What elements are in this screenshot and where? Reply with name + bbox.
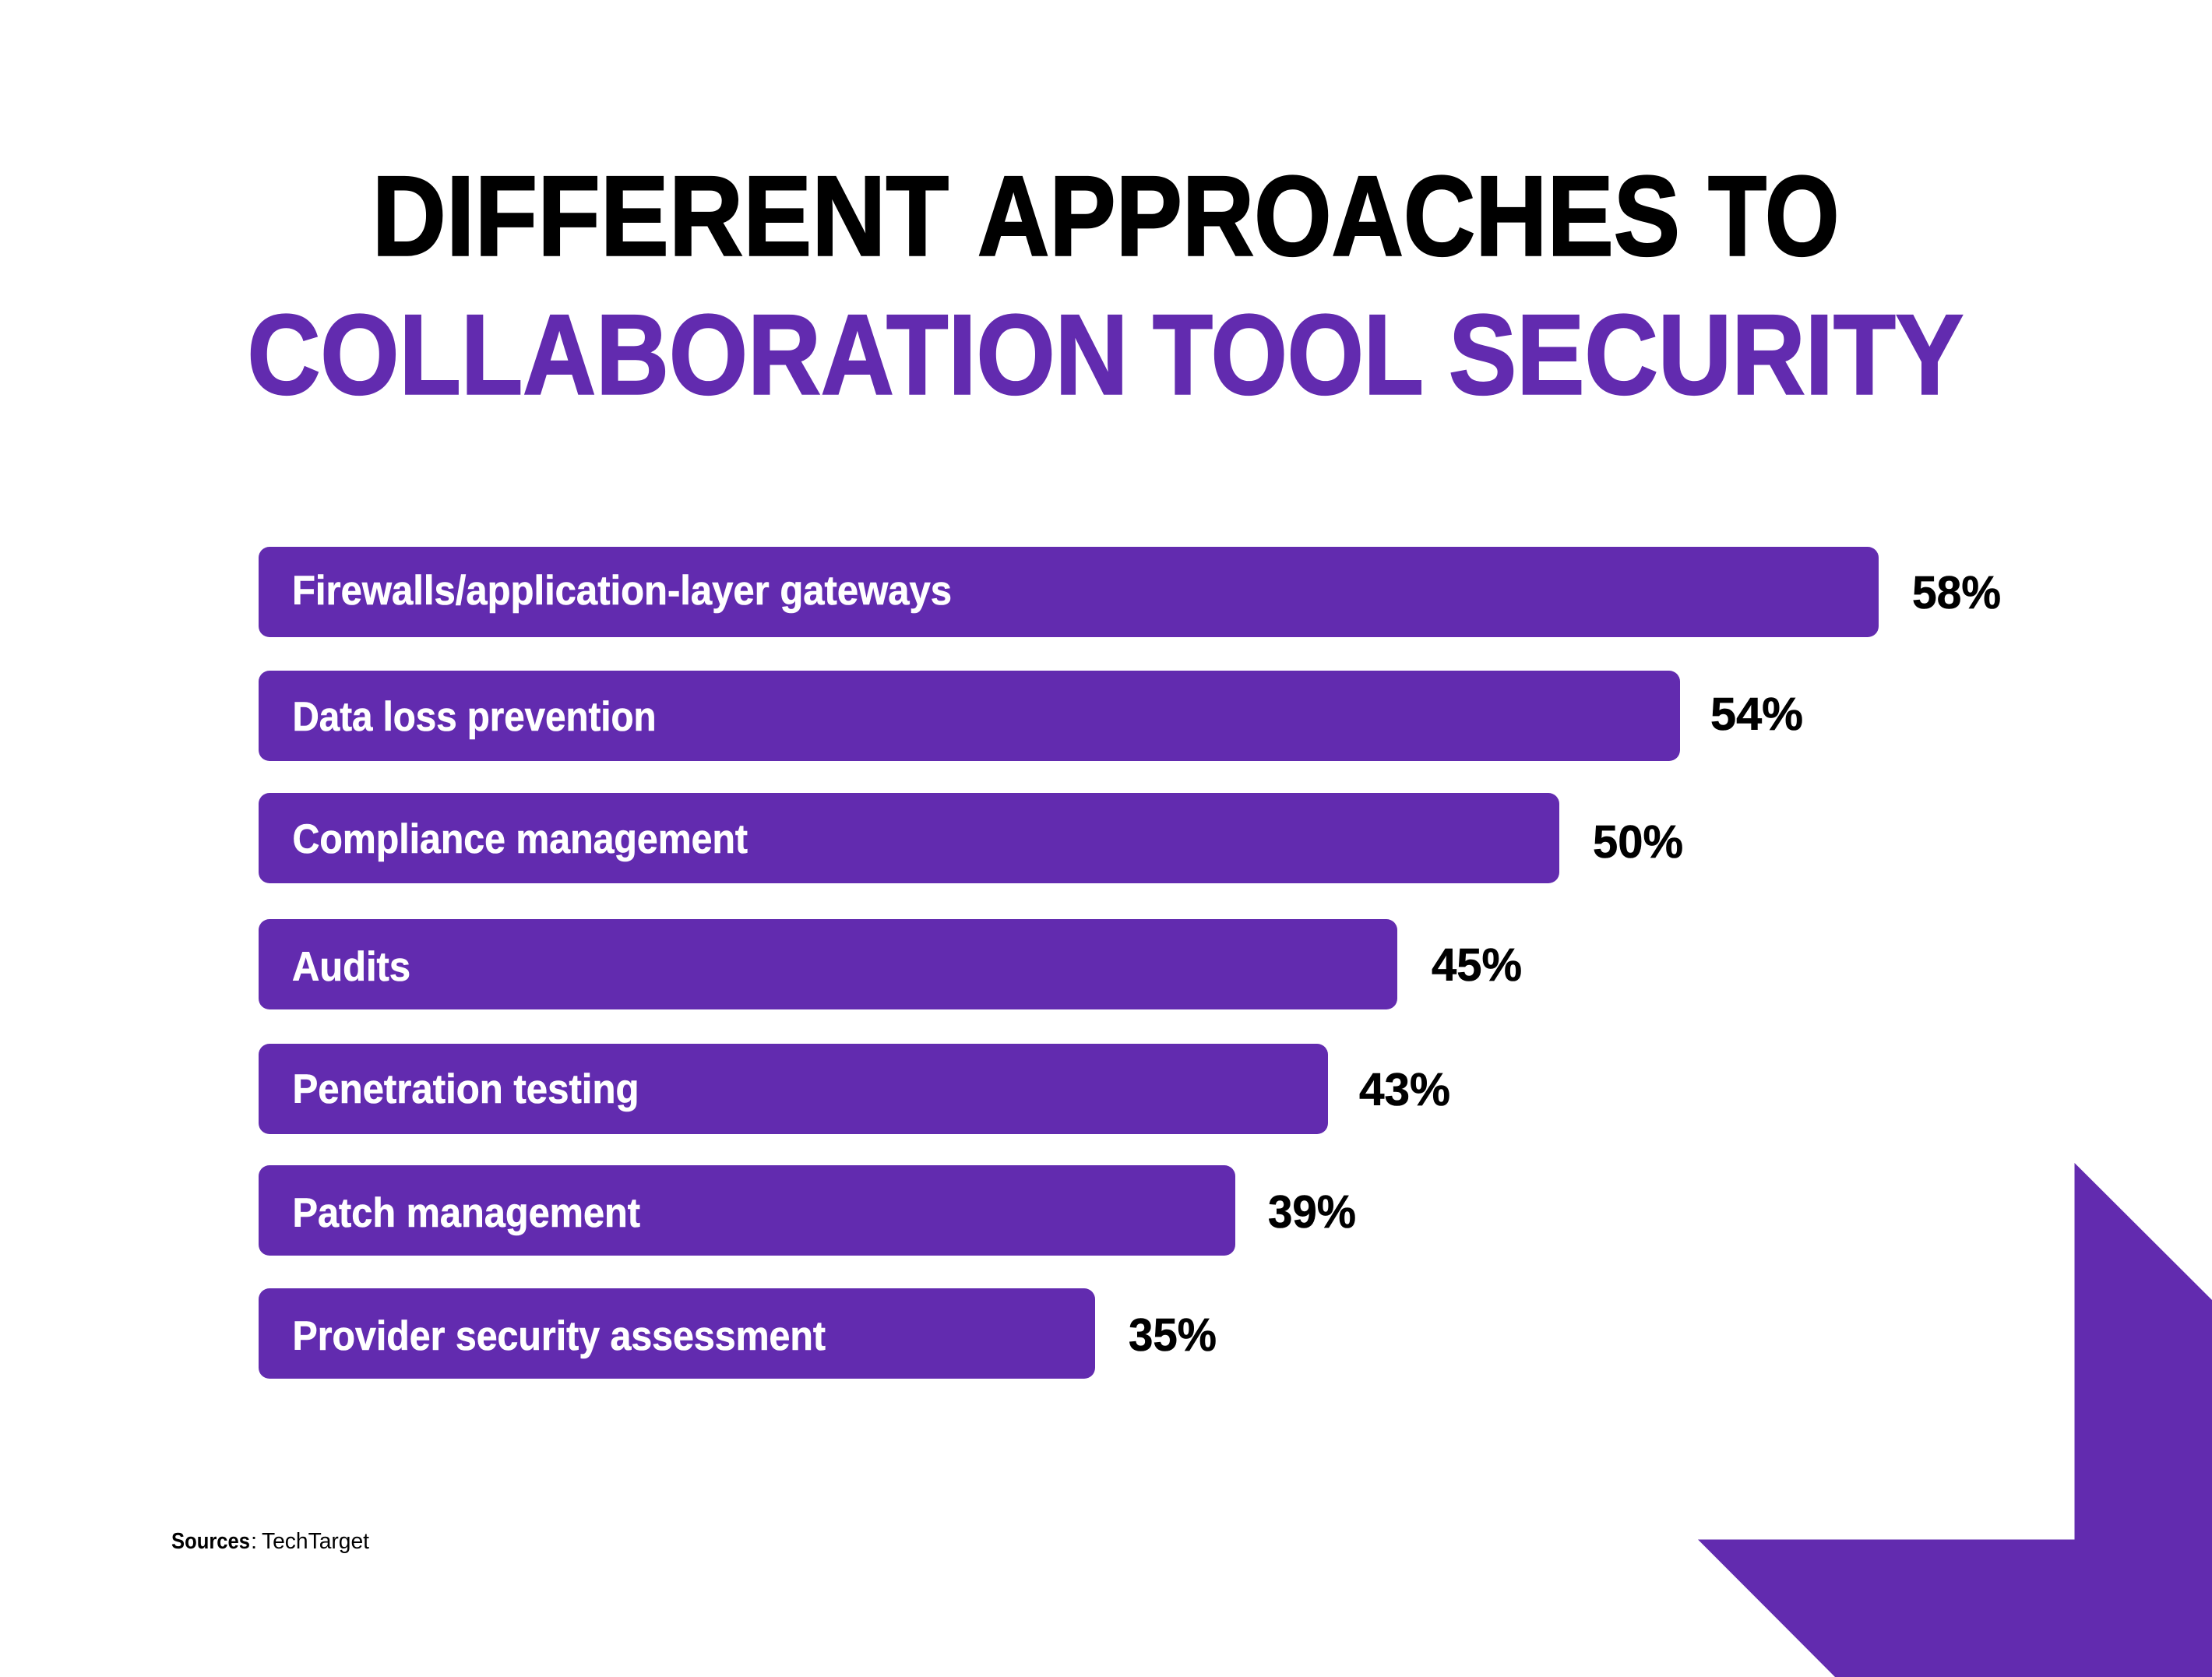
title (248, 153, 1964, 417)
source note: TechTarget (262, 1529, 369, 1554)
bar: Firewalls/application-layer gateways 58%: Firewalls/application-layer gateways (292, 568, 952, 614)
title line 1: DIFFERENT (372, 153, 949, 279)
title line 1: TO (1708, 153, 1840, 279)
bar: Patch management 39%: Patch management (293, 1190, 640, 1236)
title line 2: COLLABORATION (248, 291, 1128, 417)
bar: Penetration testing 43%: 43% (1359, 1064, 1450, 1115)
bar: Provider security assessment 35%: Provider security assessment (293, 1313, 826, 1359)
bar: Patch management 39% (259, 1165, 1356, 1256)
bar: Patch management 39%: 39% (1268, 1186, 1356, 1238)
bar: Audits 45%: Audits (292, 944, 410, 990)
bar: Data loss prevention 54%: Data loss prevention (293, 694, 656, 740)
bar: Provider security assessment 35% (259, 1288, 1217, 1379)
source note: Sources (171, 1529, 250, 1554)
corner decoration: purple arrow shape (1698, 1163, 2212, 1677)
title line 1: APPROACHES (977, 153, 1680, 279)
bar chart (259, 547, 2001, 1379)
bar: Data loss prevention 54%: 54% (1710, 689, 1803, 740)
bar: Provider security assessment 35%: 35% (1129, 1309, 1217, 1361)
bar: Audits 45% (259, 919, 1522, 1009)
bar: Firewalls/application-layer gateways 58% (259, 547, 2001, 637)
bar: Data loss prevention 54% (259, 671, 1803, 761)
source note (171, 1529, 369, 1554)
bar: Penetration testing 43% (259, 1044, 1450, 1134)
bar: Firewalls/application-layer gateways 58%: 58% (1912, 567, 2001, 618)
title line 2: SECURITY (1449, 291, 1964, 417)
source note: : (251, 1529, 257, 1554)
title line 2: TOOL (1153, 291, 1424, 417)
bar: Compliance management 50% (259, 793, 1683, 883)
bar: Audits 45%: 45% (1432, 939, 1522, 991)
title line 1 (372, 153, 1840, 279)
bar: Compliance management 50%: Compliance management (293, 816, 748, 862)
bar: Penetration testing 43%: Penetration testing (293, 1066, 639, 1112)
bar: Compliance management 50%: 50% (1593, 816, 1683, 868)
title line 2 (248, 291, 1964, 417)
